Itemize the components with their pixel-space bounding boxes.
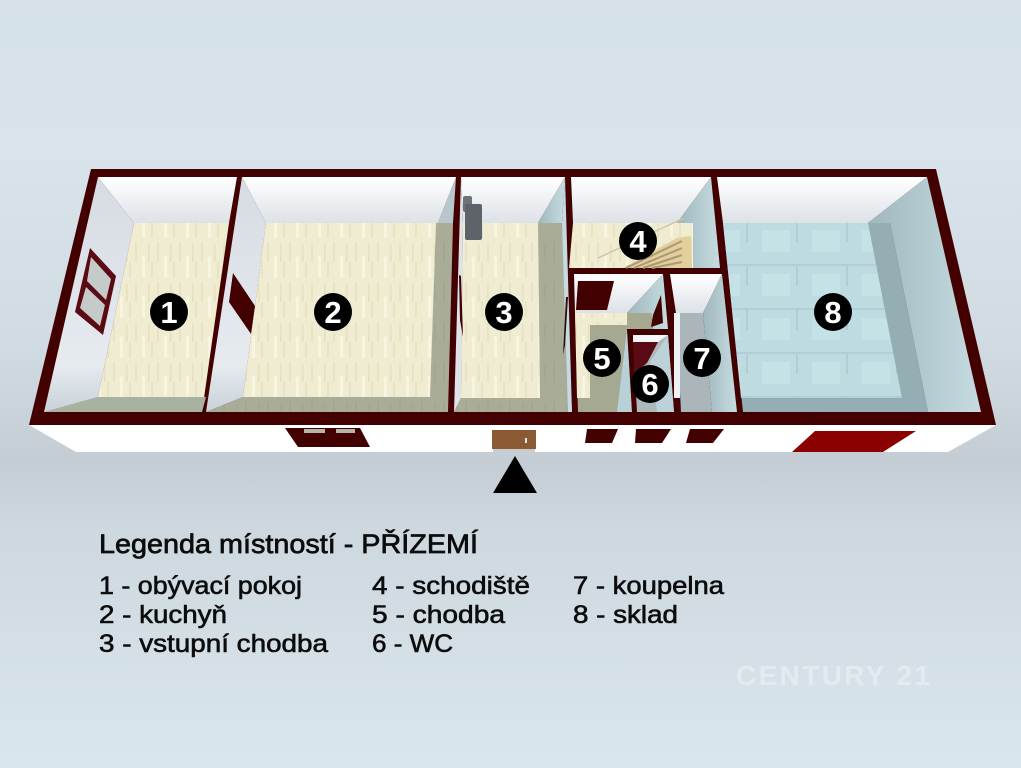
room 7 xyxy=(670,274,737,412)
marker 8 xyxy=(814,293,852,331)
marker 4 xyxy=(619,222,657,260)
watermark: CENTURY 21 xyxy=(736,660,930,691)
legend column 1: 3 - vstupní chodba xyxy=(99,630,328,658)
door back xyxy=(576,281,614,310)
legend column 2: 6 - WC xyxy=(372,630,453,658)
building walls outline xyxy=(29,169,996,452)
marker 7: 7 xyxy=(693,341,711,376)
doors xyxy=(459,275,568,355)
marker 5: 5 xyxy=(593,341,611,376)
door xyxy=(229,273,255,334)
marker 3 xyxy=(485,293,523,331)
marker 4: 4 xyxy=(629,224,647,259)
marker 6: 6 xyxy=(641,367,659,402)
legend column 3 xyxy=(573,572,724,629)
room 2 xyxy=(206,177,456,412)
marker 5 xyxy=(583,339,621,377)
marker 6 xyxy=(631,365,669,403)
legend column 3: 7 - koupelna xyxy=(573,572,724,600)
door right xyxy=(651,295,663,327)
door xyxy=(633,342,658,373)
room 8 xyxy=(717,177,981,412)
marker 8: 8 xyxy=(824,295,842,330)
room 5 xyxy=(574,274,668,412)
marker 2: 2 xyxy=(324,295,342,330)
legend column 1 xyxy=(99,572,328,658)
room 1 xyxy=(44,177,237,412)
marker 3: 3 xyxy=(495,295,513,330)
room 6 xyxy=(627,329,674,412)
front facade xyxy=(29,425,996,452)
marker 1 xyxy=(150,293,188,331)
legend title: Legenda místností - PŘÍZEMÍ xyxy=(99,528,479,559)
legend column 1: 1 - obývací pokoj xyxy=(99,572,302,600)
stairs xyxy=(598,218,692,268)
legend column 3: 8 - sklad xyxy=(573,601,678,629)
marker 1: 1 xyxy=(160,295,178,330)
window xyxy=(75,248,116,335)
entrance door xyxy=(492,430,536,452)
legend column 2: 5 - chodba xyxy=(372,601,505,629)
marker 2 xyxy=(314,293,352,331)
marker 7 xyxy=(683,339,721,377)
legend column 1: 2 - kuchyň xyxy=(99,601,227,629)
legend column 2: 4 - schodiště xyxy=(372,572,530,600)
legend column 2 xyxy=(372,572,530,658)
facade small windows xyxy=(585,429,724,443)
entrance arrow xyxy=(493,456,537,493)
stove xyxy=(463,196,482,240)
room 4 xyxy=(569,177,720,268)
room 3 xyxy=(454,177,572,412)
garage door xyxy=(792,431,916,452)
facade window xyxy=(285,428,370,447)
